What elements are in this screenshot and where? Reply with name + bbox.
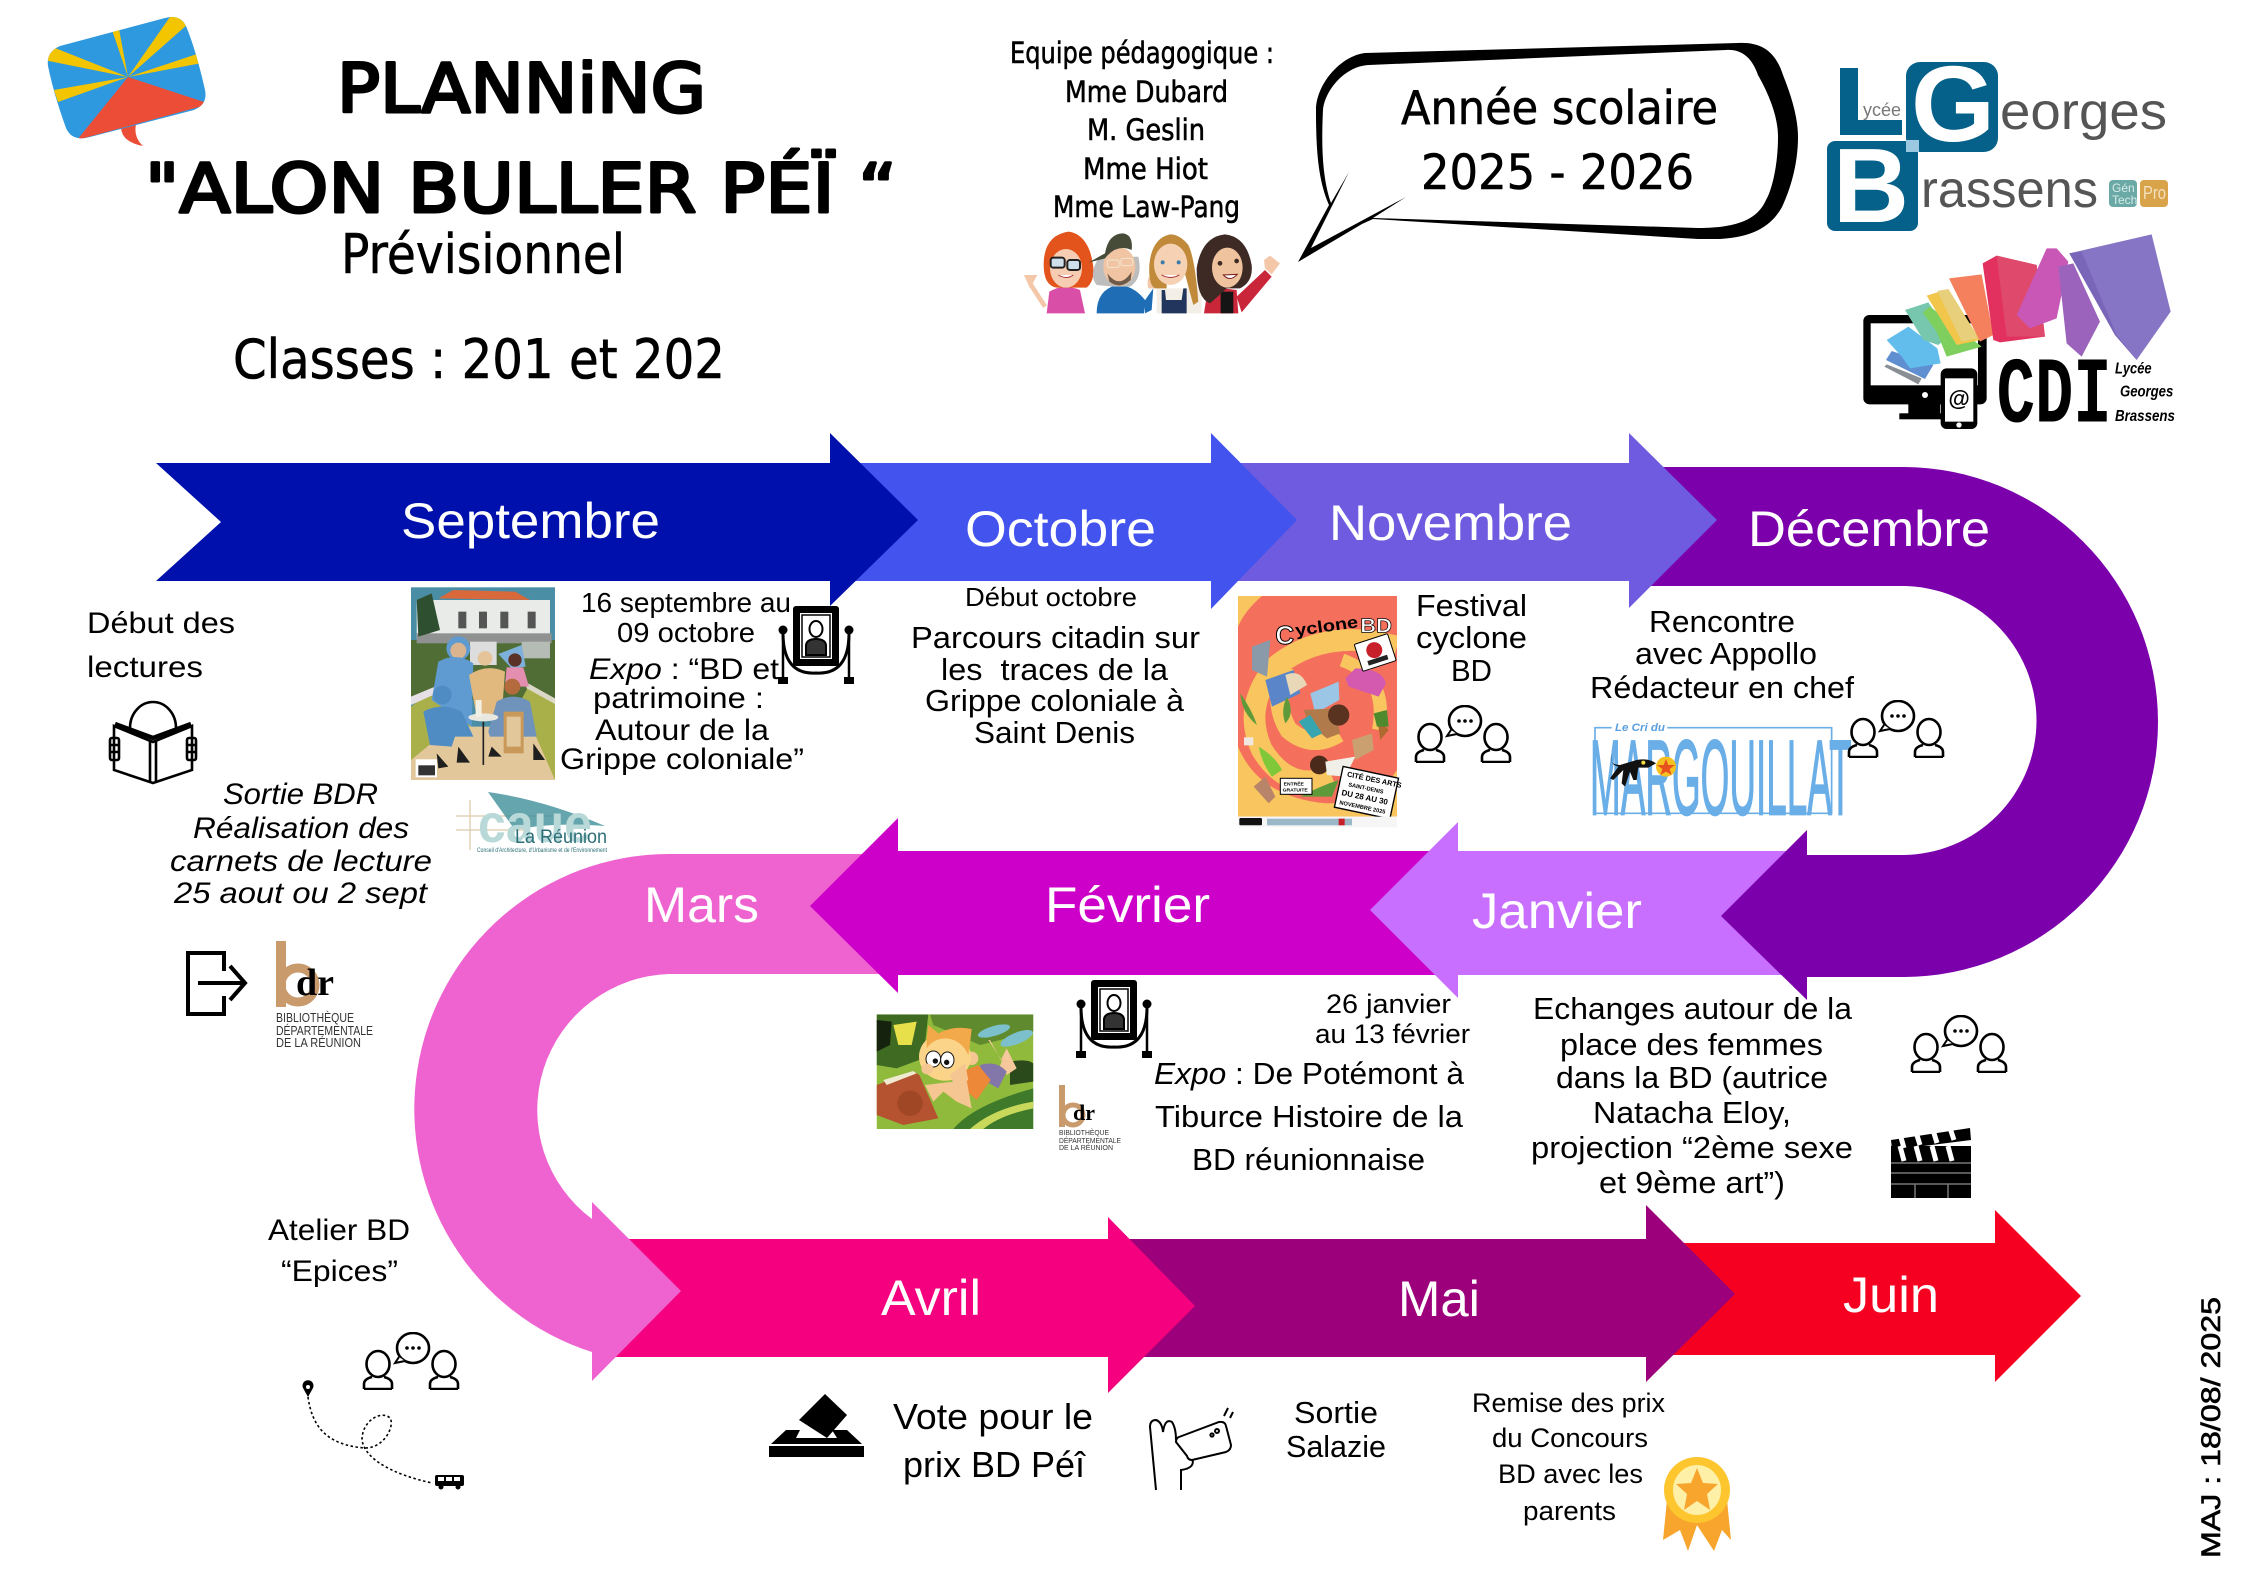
image: cyclone BD festival poster: C xyxy=(1275,620,1294,650)
text: expo BD et patrimoine: Expo : “BD et xyxy=(589,653,780,686)
text: festival cyclone BD: BD xyxy=(1451,653,1492,688)
logo: bibliotheque departementale: dr xyxy=(296,962,334,1004)
timeline arrow: Avril: Avril xyxy=(881,1270,981,1326)
icon: framed portrait exhibit xyxy=(778,606,854,684)
image: cyclone BD festival poster: yclone xyxy=(1294,612,1359,640)
text: expo De Potemont a Tiburce xyxy=(1154,989,1470,1177)
logo: CDI with monitor, phone and books: Georges xyxy=(2120,384,2173,401)
text: atelier BD epices: Atelier BD xyxy=(268,1214,410,1247)
timeline arrow: Juin: Juin xyxy=(1843,1267,1939,1323)
logo: CAUE La Reunion: Conseil d'Architecture, d'Urbanisme et de l'Environnement xyxy=(477,848,607,854)
avatars of the team xyxy=(1024,232,1280,313)
image: cyclone BD festival poster: GRATUITE xyxy=(1283,788,1308,794)
timeline arrow: Novembre xyxy=(1200,433,1717,608)
logo: Reunion flag speech bubble xyxy=(48,17,206,146)
text: festival cyclone BD: cyclone xyxy=(1416,620,1527,655)
logo: Lycee Georges Brassens: Gén xyxy=(2112,181,2135,195)
text: parcours citadin: Saint Denis xyxy=(974,715,1135,750)
teaching team names: Mme Dubard xyxy=(1065,75,1228,109)
logo: Lycee Georges Brassens: B xyxy=(1833,127,1909,245)
image: cyclone BD festival poster: SAINT-DENIS xyxy=(1348,782,1384,796)
text: rencontre Appollo: avec Appollo xyxy=(1635,636,1817,671)
text: expo BD et patrimoine: patrimoine : xyxy=(593,682,764,715)
teaching team names: Mme Hiot xyxy=(1083,152,1208,186)
text: parcours citadin: Parcours citadin sur xyxy=(911,620,1200,655)
logo: Lycee Georges Brassens: Tech xyxy=(2112,193,2137,207)
text: rencontre Appollo: Rédacteur en chef xyxy=(1590,670,1854,705)
text: remise des prix: du Concours xyxy=(1492,1423,1648,1453)
text: atelier BD epices xyxy=(268,1214,410,1288)
icon: ballot box xyxy=(769,1394,864,1457)
text: vote pour le prix: Vote pour le xyxy=(893,1396,1093,1437)
text: debut des lectures: Début des xyxy=(87,607,235,640)
text: sortie BDR: Réalisation des xyxy=(193,812,409,845)
logo: Lycee Georges Brassens: Pro xyxy=(2143,183,2166,203)
teaching team names: Mme Law-Pang xyxy=(1053,190,1240,224)
text: vote pour le prix: prix BD Péî xyxy=(903,1444,1086,1485)
text: sortie Salazie: Salazie xyxy=(1286,1429,1386,1464)
text: expo BD et patrimoine: Grippe coloniale” xyxy=(560,743,804,776)
logo: small bibliotheque departementale: dr xyxy=(1073,1100,1095,1125)
text: echanges autour de la place des femmes: Natacha Eloy, xyxy=(1593,1095,1791,1130)
text: sortie BDR: 25 aout ou 2 sept xyxy=(173,877,429,910)
image: child reading a comic xyxy=(877,1014,1035,1129)
logo: Lycee Georges Brassens: rassens xyxy=(1921,161,2098,219)
text: remise des prix: BD avec les xyxy=(1498,1459,1643,1489)
timeline arrow: Novembre: Novembre xyxy=(1329,495,1572,551)
text: festival cyclone BD xyxy=(1416,588,1527,688)
text: echanges autour de la place des femmes: et 9ème art”) xyxy=(1599,1165,1785,1200)
icon: award medal xyxy=(1663,1457,1731,1551)
image: cyclone BD festival poster: ENTRÉE xyxy=(1284,780,1305,788)
text: echanges autour de la place des femmes: dans la BD (autrice xyxy=(1556,1060,1828,1095)
timeline arrow: Decembre: Décembre xyxy=(1748,501,1990,557)
logo: CDI with monitor, phone and books: Lycée xyxy=(2115,360,2152,377)
logo: CDI with monitor, phone and books: @ xyxy=(1948,386,1970,411)
image: comic cover grippe coloniale xyxy=(411,587,555,780)
text: sortie Salazie xyxy=(1286,1395,1386,1464)
logo: bibliotheque departementale: DÉPARTEMENTALE xyxy=(276,1023,373,1038)
title: "ALON BULLER PÉÏ “ xyxy=(145,149,897,229)
text: vote pour le prix xyxy=(893,1396,1093,1485)
text: remise des prix xyxy=(1472,1388,1665,1526)
speech bubble: school year xyxy=(1298,43,1798,262)
subtitle: Prévisionnel xyxy=(341,223,625,286)
text: expo De Potemont a Tiburce: Tiburce Histoire de la xyxy=(1155,1099,1464,1134)
text: echanges autour de la place des femmes: Echanges autour de la xyxy=(1533,991,1853,1026)
timeline arrow: Octobre: Octobre xyxy=(965,501,1156,557)
timeline arrow: Janvier: Janvier xyxy=(1472,883,1642,939)
logo: Lycee Georges Brassens: G xyxy=(1911,43,1995,164)
image: cyclone BD festival poster: NOVEMBRE 2025 xyxy=(1339,800,1386,816)
timeline arrow: Avril xyxy=(600,1217,1195,1393)
timeline arrow: Juin xyxy=(1640,1210,2081,1382)
text: sortie BDR: Sortie BDR xyxy=(223,778,378,811)
timeline arrow: Mai: Mai xyxy=(1398,1271,1480,1327)
timeline arrow: Mars xyxy=(414,854,905,1381)
text: sortie BDR xyxy=(170,778,432,910)
logo: CDI with monitor, phone and books xyxy=(1863,234,2175,451)
timeline arrow: Septembre xyxy=(156,433,918,606)
text: remise des prix: Remise des prix xyxy=(1472,1388,1665,1418)
logo: small bibliotheque departementale: DÉPARTEMENTALE xyxy=(1059,1136,1121,1145)
timeline arrow: Fevrier xyxy=(810,818,1440,993)
icon: people talking 1 xyxy=(1416,706,1510,762)
text: debut des lectures: lectures xyxy=(87,651,203,684)
text: festival cyclone BD: Festival xyxy=(1416,588,1527,623)
logo: bibliotheque departementale: DE LA RÉUNION xyxy=(276,1035,361,1050)
logo: small bibliotheque departementale: DE LA RÉUNION xyxy=(1059,1143,1113,1152)
speech bubble: school year: 2025 - 2026 xyxy=(1421,145,1694,201)
icon: people talking 2 xyxy=(1849,701,1943,757)
text: rencontre Appollo xyxy=(1590,604,1854,705)
title: PLANNiNG xyxy=(337,50,706,129)
logo: Lycee Georges Brassens xyxy=(1827,43,2168,245)
icon: hand holding a phone xyxy=(1150,1408,1233,1490)
icon: person reading xyxy=(110,702,196,783)
text: debut des lectures xyxy=(87,607,235,684)
timeline arrow: Mars: Mars xyxy=(644,877,759,933)
text: expo De Potemont a Tiburce: BD réunionnaise xyxy=(1192,1142,1425,1177)
text: expo BD et patrimoine: 16 septembre au xyxy=(581,587,791,618)
logo: Lycee Georges Brassens: ycée xyxy=(1863,100,1901,120)
timeline arrow: Mai xyxy=(1100,1205,1735,1382)
classes: Classes : 201 et 202 xyxy=(233,328,725,391)
last update date: MAJ : 18/08/ 2025 xyxy=(2196,1297,2226,1558)
logo: small bibliotheque departementale: BIBLIOTHÈQUE xyxy=(1059,1128,1109,1137)
text: expo De Potemont a Tiburce: 26 janvier xyxy=(1326,989,1451,1019)
image: cyclone BD festival poster: DU 28 AU 30 xyxy=(1341,788,1389,807)
logo: CAUE La Reunion: La Réunion xyxy=(515,827,607,848)
icon: framed portrait exhibit 2 xyxy=(1076,980,1152,1058)
text: parcours citadin xyxy=(911,582,1200,750)
icon: people talking 4 xyxy=(364,1333,458,1389)
image: cyclone BD festival poster xyxy=(1238,596,1403,827)
text: parcours citadin: les traces de la xyxy=(941,652,1169,687)
logo: CDI with monitor, phone and books: Brassens xyxy=(2115,408,2175,425)
logo: le cri du margouillat: Le Cri du xyxy=(1615,722,1665,734)
teaching team names: M. Geslin xyxy=(1087,113,1205,147)
logo: Lycee Georges Brassens: eorges xyxy=(2000,83,2167,141)
logo: CAUE La Reunion: caue xyxy=(478,794,592,854)
text: parcours citadin: Début octobre xyxy=(965,582,1137,612)
logo: bibliotheque departementale: BIBLIOTHÈQUE xyxy=(276,1010,354,1025)
text: echanges autour de la place des femmes: projection “2ème sexe xyxy=(1531,1130,1853,1165)
text: atelier BD epices: “Epices” xyxy=(281,1255,398,1288)
icon: exit arrow xyxy=(188,953,245,1014)
timeline arrow: Septembre: Septembre xyxy=(401,493,660,549)
speech bubble: school year: Année scolaire xyxy=(1401,81,1718,135)
timeline arrow: Octobre xyxy=(825,433,1297,609)
logo: le cri du margouillat xyxy=(1590,717,1852,837)
text: remise des prix: parents xyxy=(1523,1496,1616,1526)
logo: small bibliotheque departementale xyxy=(1059,1085,1121,1152)
timeline arrow: Fevrier: Février xyxy=(1045,877,1210,933)
icon: route map with pin and bus xyxy=(302,1380,464,1490)
text: echanges autour de la place des femmes xyxy=(1531,991,1853,1200)
title xyxy=(145,50,897,229)
icon: film clapperboard xyxy=(1891,1128,1971,1198)
text: expo BD et patrimoine: Autour de la xyxy=(595,714,769,747)
text: rencontre Appollo: Rencontre xyxy=(1649,604,1795,639)
teaching team names: Equipe pédagogique : xyxy=(1010,36,1274,70)
text: expo BD et patrimoine: 09 octobre xyxy=(617,617,755,648)
text: parcours citadin: Grippe coloniale à xyxy=(925,683,1185,718)
text: expo De Potemont a Tiburce: Expo : De Potémont à xyxy=(1154,1056,1465,1091)
logo: CDI with monitor, phone and books: CDI xyxy=(1997,345,2112,451)
timeline arrow: Decembre xyxy=(1640,467,2158,1000)
icon: people talking 3 xyxy=(1912,1016,2006,1072)
text: sortie Salazie: Sortie xyxy=(1294,1395,1378,1430)
text: expo De Potemont a Tiburce: au 13 février xyxy=(1315,1019,1470,1049)
teaching team names xyxy=(1010,36,1274,224)
text: echanges autour de la place des femmes: place des femmes xyxy=(1560,1027,1823,1062)
logo: bibliotheque departementale xyxy=(276,941,373,1050)
text: sortie BDR: carnets de lecture xyxy=(170,845,432,878)
image: cyclone BD festival poster: BD xyxy=(1360,616,1392,638)
image: cyclone BD festival poster: CITÉ DES ARTS xyxy=(1346,770,1403,790)
timeline arrow: Janvier xyxy=(1370,822,1795,998)
text: expo BD et patrimoine xyxy=(560,587,804,776)
